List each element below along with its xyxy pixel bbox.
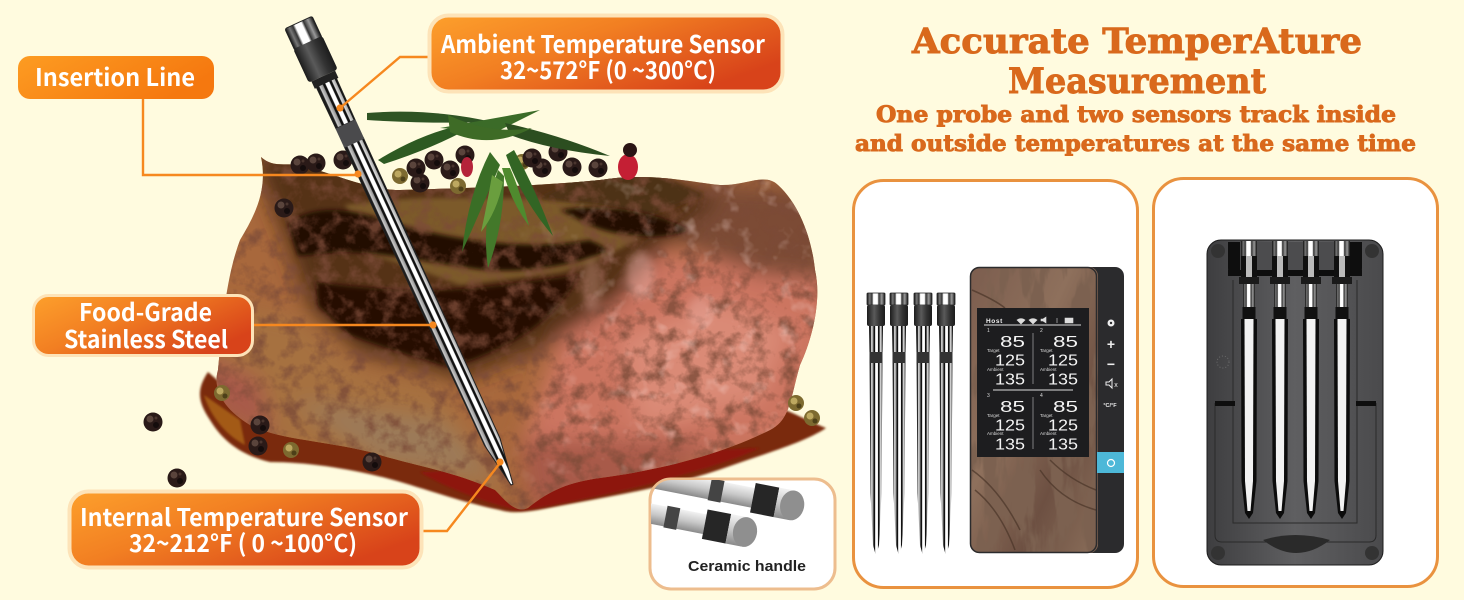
label: internal temperature sensor	[70, 492, 422, 568]
lcd screen: 135	[1048, 436, 1078, 454]
grill marks	[288, 210, 610, 271]
power button	[1097, 452, 1124, 473]
lcd screen: 135	[995, 436, 1025, 454]
lcd screen: 125	[1048, 352, 1078, 370]
tray body	[1207, 240, 1383, 565]
stored probes	[1239, 241, 1352, 519]
top surface tan	[345, 198, 660, 285]
lcd screen: 4	[1040, 393, 1043, 399]
glossy highlights	[582, 251, 712, 328]
steak illustration	[144, 110, 830, 520]
lcd screen: 1	[987, 328, 990, 334]
rosemary sprig	[367, 110, 610, 268]
lcd screen: Ambient	[987, 431, 1004, 436]
label: insertion line	[18, 56, 214, 99]
label: internal temperature sensor: Internal Temperature Sensor	[80, 498, 409, 533]
label: ambient temperature sensor: 32~572°F (0 ~300°C)	[500, 51, 716, 86]
label: food-grade stainless steel: Food-Grade	[79, 293, 212, 328]
lcd screen: Host	[986, 318, 1003, 325]
leader: stainless steel	[254, 321, 437, 329]
subtitle	[855, 102, 1416, 157]
lcd screen: Ambient	[1040, 431, 1057, 436]
label: ambient temperature sensor	[430, 16, 782, 92]
display unit	[970, 267, 1124, 553]
lcd screen	[977, 308, 1089, 457]
label: insertion line: Insertion Line	[35, 58, 195, 93]
lcd screen: 3	[987, 393, 990, 399]
lcd screen: 125	[995, 352, 1025, 370]
loose peppercorns	[144, 385, 820, 488]
side buttons: −	[1107, 356, 1115, 372]
leader: ambient sensor	[336, 57, 428, 112]
side buttons: +	[1107, 336, 1115, 352]
four probes	[867, 293, 955, 556]
meat body	[200, 150, 830, 520]
side buttons	[1103, 320, 1118, 409]
panel: ceramic handle	[648, 478, 836, 590]
lcd screen: Ambient	[1040, 367, 1057, 372]
subtitle: One probe and two sensors track inside	[876, 102, 1396, 128]
panel: storage tray	[1154, 178, 1438, 586]
lcd screen: Target	[987, 348, 1000, 353]
pink peppercorn	[461, 143, 638, 180]
side buttons: x	[1114, 382, 1118, 389]
lcd screen: 85	[1053, 399, 1078, 416]
peppercorns on top	[274, 142, 608, 218]
side buttons: °C/°F	[1103, 403, 1117, 409]
label: ambient temperature sensor: Ambient Temperature Sensor	[440, 25, 765, 60]
lcd screen: Ambient	[987, 367, 1004, 372]
lcd screen: 135	[995, 372, 1025, 388]
lcd screen: 125	[1048, 418, 1078, 434]
lcd screen: 2	[1040, 328, 1043, 334]
label: food-grade stainless steel: Stainless Steel	[64, 320, 228, 355]
caption: Ceramic handle	[688, 558, 806, 575]
subtitle: and outside temperatures at the same time	[855, 131, 1416, 157]
sauce pool	[200, 372, 826, 512]
lcd screen: 85	[1000, 334, 1025, 351]
label: food-grade stainless steel	[34, 293, 252, 356]
lcd screen: Target	[1040, 348, 1053, 353]
crust texture	[200, 150, 830, 520]
lcd screen: Target	[1040, 413, 1053, 418]
lcd screen: 135	[1048, 372, 1078, 388]
title	[911, 21, 1362, 102]
label: internal temperature sensor: 32~212°F ( 0 ~100°C)	[129, 524, 357, 559]
handle rods	[651, 480, 804, 547]
probe	[284, 16, 527, 491]
lcd screen: 125	[995, 418, 1025, 434]
leader: internal sensor	[423, 458, 504, 531]
title: Measurement	[1008, 61, 1266, 102]
lcd screen: 85	[1053, 334, 1078, 351]
lcd screen: 85	[1000, 399, 1025, 416]
title: Accurate TemperAture	[911, 21, 1362, 62]
lcd screen: Target	[987, 413, 1000, 418]
leader: insertion line	[143, 99, 362, 178]
panel: probes and display	[854, 180, 1138, 588]
